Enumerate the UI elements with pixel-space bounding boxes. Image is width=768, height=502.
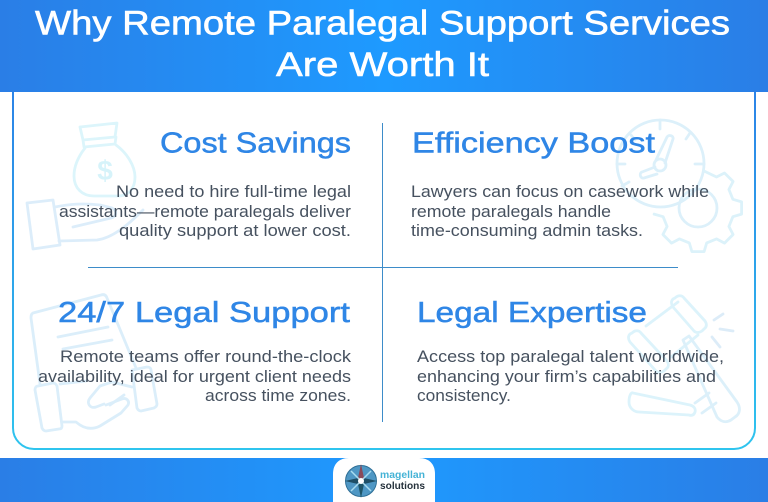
panel: efficiency boost	[411, 128, 709, 240]
text: 24/7 legal support body	[38, 348, 352, 405]
text: efficiency boost body: time-consuming admin tasks.	[411, 222, 643, 240]
text: legal expertise body: Access top paralegal talent worldwide,	[417, 348, 724, 366]
text: cost savings body: assistants—remote paralegals deliver	[59, 203, 352, 221]
heading: legal expertise: Legal Expertise	[417, 297, 647, 329]
title: Are Worth It	[276, 46, 489, 84]
icon: document and handshake	[31, 295, 157, 431]
panel: 24/7 legal support	[38, 297, 352, 405]
heading: efficiency boost: Efficiency Boost	[412, 128, 655, 160]
icon: clock and gear	[617, 120, 742, 252]
text: efficiency boost body	[411, 183, 709, 240]
icon: gavel	[628, 296, 739, 422]
panel: cost savings	[59, 128, 352, 240]
text: cost savings body: quality support at lower cost.	[119, 222, 351, 240]
title: Why Remote Paralegal Support Services	[35, 4, 730, 42]
text: efficiency boost body: remote paralegals handle	[411, 203, 611, 221]
wordmark: solutions	[380, 480, 425, 492]
header banner	[0, 0, 768, 92]
text: cost savings body	[59, 183, 352, 240]
title	[35, 4, 730, 84]
text: legal expertise body: enhancing your firm’s capabilities and	[417, 368, 716, 386]
wordmark: magellan	[380, 469, 425, 481]
text: efficiency boost body: Lawyers can focus on casework while	[411, 183, 709, 201]
footer bar	[0, 458, 768, 502]
text: cost savings body: No need to hire full-time legal	[116, 183, 351, 201]
vertical divider	[382, 123, 383, 422]
content frame	[13, 50, 755, 449]
horizontal divider	[88, 267, 678, 268]
text: legal expertise body	[417, 348, 724, 405]
heading: cost savings: Cost Savings	[160, 128, 351, 160]
heading: 24/7 legal support: 24/7 Legal Support	[58, 297, 350, 329]
text: 24/7 legal support body: Remote teams offer round-the-clock	[60, 348, 352, 366]
logo	[333, 458, 435, 502]
text: 24/7 legal support body: availability, ideal for urgent client needs	[38, 368, 351, 386]
text: legal expertise body: consistency.	[417, 387, 511, 405]
text: 24/7 legal support body: across time zones.	[205, 387, 351, 405]
wordmark	[380, 469, 425, 492]
icon: money bag in hand: $	[97, 155, 113, 186]
panel: legal expertise	[417, 297, 724, 405]
icon: money bag in hand	[27, 123, 143, 249]
icon: compass	[345, 464, 377, 498]
